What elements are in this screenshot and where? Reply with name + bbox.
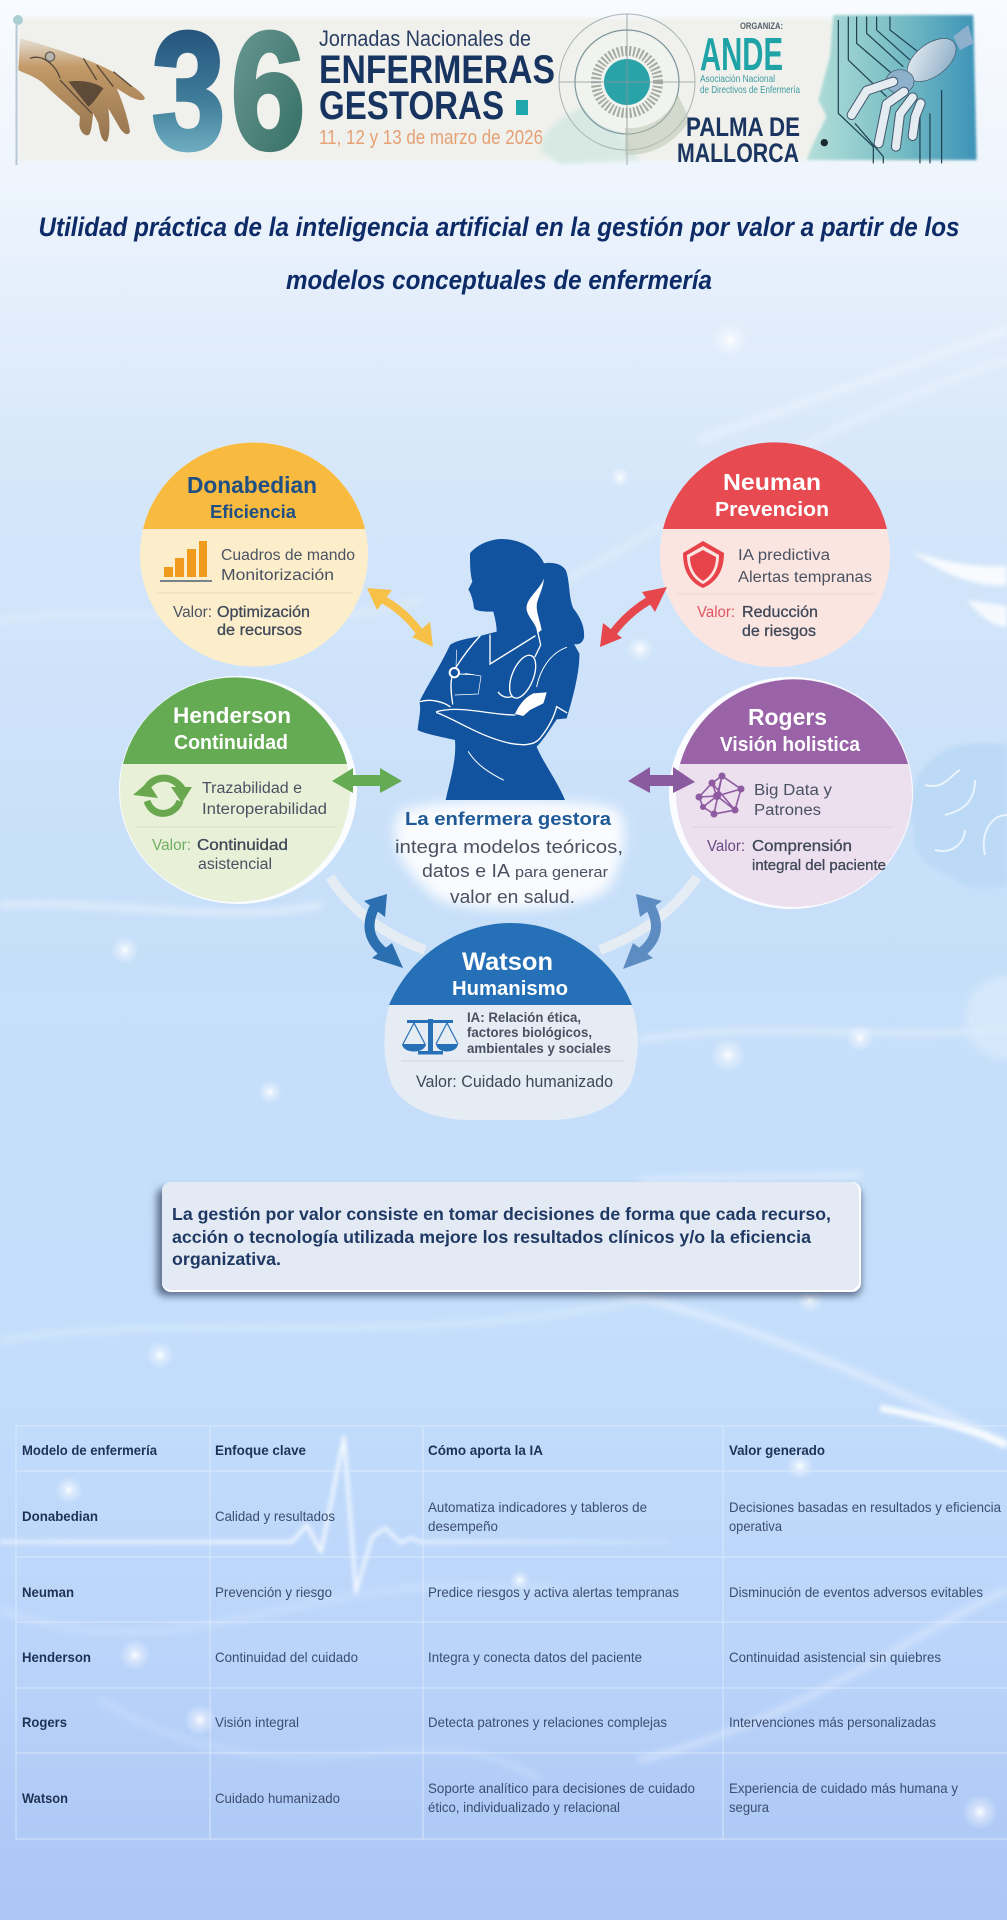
heading: Donabedian: Donabedian [187,472,317,498]
banner title [319,26,555,149]
text: IA Watson: ambientales y sociales [467,1041,611,1056]
text: valor Henderson: Continuidad [197,837,288,854]
Palma de Mallorca: MALLORCA [677,138,799,168]
table row: Henderson: Henderson [22,1649,91,1665]
icon: brain background [910,743,1007,888]
panel: Henderson [119,676,357,904]
text: valor Neuman: Valor: [697,604,735,621]
ANDE logo: Asociación Nacional [700,73,775,85]
table row: Watson: Cuidado humanizado [215,1790,340,1806]
banner title: 11, 12 y 13 de marzo de 2026 [319,127,543,149]
big number 36: 3 [152,0,225,184]
text: valor Donabedian [173,604,310,639]
heading: Watson: Humanismo [452,978,568,1000]
table row: Watson: segura [729,1799,769,1815]
table row: Donabedian: operativa [729,1518,782,1534]
table grid [16,1426,1007,1839]
arrow: Donabedian [367,588,433,647]
text: valor Donabedian: de recursos [217,622,302,639]
heading: Donabedian [187,472,317,522]
banner title: ENFERMERAS [319,48,555,92]
heading: Rogers [720,704,861,756]
callout text: La gestión por valor consiste en tomar decisiones de forma que cada recurso, [172,1204,831,1224]
banner [13,13,978,165]
arrow: Watson right [623,894,662,969]
heading: Neuman [715,469,829,521]
central text backdrop [395,800,624,909]
heading: Watson [452,948,568,1000]
table row: Rogers: Rogers [22,1714,67,1730]
text: IA predictiva: Alertas tempranas [738,569,872,586]
table row: Henderson: Integra y conecta datos del paciente [428,1649,642,1665]
table row: Donabedian: Decisiones basadas en resultados y eficiencia [729,1499,1001,1515]
table row: Watson: Watson [22,1790,68,1806]
icon: shield [683,541,724,588]
circuit and robot hand [807,15,977,163]
ANDE logo: ANDE [700,28,783,80]
table row: Donabedian [22,1499,1001,1534]
text: Big Data: Big Data y [754,782,832,799]
table row: Henderson: Continuidad asistencial sin quiebres [729,1649,941,1665]
table row: Rogers: Intervenciones más personalizadas [729,1714,936,1730]
text: valor Henderson: asistencial [198,856,272,873]
table row: Neuman: Disminución de eventos adversos evitables [729,1584,983,1600]
panel: Donabedian [140,442,368,666]
heading: Neuman: Neuman [723,469,821,495]
table header: Enfoque clave [215,1442,306,1458]
table row: Henderson: Continuidad del cuidado [215,1649,358,1665]
heading: Watson: Watson [462,948,553,976]
Palma de Mallorca [678,118,800,162]
ANDE logo [700,21,800,96]
title: modelos conceptuales de enfermería [286,265,712,295]
table header: Modelo de enfermería [22,1442,157,1458]
table row: Watson [22,1780,958,1815]
text: valor Rogers: Valor: [707,838,745,855]
heading: Henderson: Henderson [173,703,291,728]
callout text: acción o tecnología utilizada mejore los resultados clínicos y/o la eficiencia [172,1227,811,1247]
ANDE logo: ORGANIZA: [740,21,783,32]
table row: Watson: Soporte analítico para decisiones de cuidado [428,1780,695,1796]
callout text [172,1204,831,1269]
table row: Donabedian: Donabedian [22,1508,98,1524]
table row: Rogers [22,1714,936,1730]
text: Cuadros de mando: Cuadros de mando [221,547,355,564]
connector: Rogers to Watson [600,877,697,950]
table row: Neuman [22,1584,983,1600]
text: valor Henderson [152,837,288,873]
panel: Neuman [660,442,890,667]
table row: Rogers: Visión integral [215,1714,299,1730]
text: Trazabilidad: Trazabilidad e [202,780,302,797]
icon: data network [696,772,744,818]
table row: Watson: Experiencia de cuidado más humana y [729,1780,958,1796]
table header [22,1442,825,1458]
connector: Henderson to Watson [330,877,425,950]
arrow: Henderson [332,768,402,793]
table row: Henderson [22,1649,941,1665]
arrow: Watson left [364,894,403,968]
teal wash left of circle [540,100,640,165]
table [16,1426,1007,1839]
big number 36: 6 [231,0,305,184]
central statement: para generar [515,864,608,881]
text: IA predictiva [738,547,872,586]
heading: Rogers: Visión holistica [720,734,861,756]
heading: Henderson [173,703,291,754]
table row: Neuman: Prevención y riesgo [215,1584,332,1600]
heading: Rogers: Rogers [748,704,827,730]
banner title: Jornadas Nacionales de [319,26,531,51]
arrow: Rogers [628,767,695,793]
text: valor Watson: Valor: Cuidado humanizado [416,1072,613,1091]
text: IA Watson [467,1010,611,1056]
text: valor Donabedian: Valor: [173,604,212,621]
text: valor Neuman: de riesgos [742,623,816,640]
heading: Neuman: Prevencion [715,499,829,521]
callout text: organizativa. [172,1249,281,1269]
central statement: datos e IA [422,860,511,881]
text: valor Rogers [707,838,886,874]
text: valor Rogers: integral del paciente [752,858,886,874]
text: valor Rogers: Comprensión [752,838,852,855]
icon: bar chart [160,541,212,582]
icon: cycle arrows [133,778,192,813]
central statement: La enfermera gestora [405,808,612,829]
text: Big Data [754,782,832,819]
central statement: valor en salud. [450,886,575,907]
text: valor Donabedian: Optimización [217,604,310,621]
text: Trazabilidad [202,780,327,818]
table row: Neuman: Neuman [22,1584,74,1600]
title [38,212,960,295]
text: Cuadros de mando: Monitorización [221,567,334,584]
ANDE logo: de Directivos de Enfermería [700,84,800,96]
banner background [18,18,833,160]
table row: Neuman: Predice riesgos y activa alertas tempranas [428,1584,679,1600]
ECG line [0,1437,668,1592]
panel: Watson [384,923,638,1120]
icon: scales [402,1019,458,1054]
icon: nurse silhouette [418,539,584,800]
heading: Donabedian: Eficiencia [210,502,297,522]
Palma de Mallorca: PALMA DE [686,112,800,142]
heading: Henderson: Continuidad [174,732,288,754]
central statement [395,808,623,907]
callout: gestion por valor [157,1182,861,1296]
text: IA Watson: factores biológicos, [467,1025,592,1040]
text: valor Neuman [697,604,818,640]
icon: circular architecture [559,14,695,165]
big number 36 [152,30,302,152]
table row: Rogers: Detecta patrones y relaciones complejas [428,1714,667,1730]
table header: Valor generado [729,1442,825,1458]
panel: Rogers [669,677,913,909]
text: Trazabilidad: Interoperabilidad [202,801,327,818]
table row: Donabedian: Automatiza indicadores y tableros de [428,1499,647,1515]
icon: organic hand [18,38,145,142]
table header: Cómo aporta la IA [428,1442,543,1458]
central statement: integra modelos teóricos, [395,836,623,857]
text: Cuadros de mando [221,547,355,584]
table row: Donabedian: desempeño [428,1518,498,1534]
text: Big Data: Patrones [754,802,821,819]
text: valor Neuman: Reducción [742,604,818,621]
text: IA Watson: IA: Relación ética, [467,1010,581,1025]
text: IA predictiva: IA predictiva [738,547,830,564]
text: valor Henderson: Valor: [152,837,191,854]
banner title: GESTORAS [319,84,504,128]
table row: Watson: ético, individualizado y relacional [428,1799,620,1815]
table row: Donabedian: Calidad y resultados [215,1508,335,1524]
arrow: Neuman [600,587,667,647]
